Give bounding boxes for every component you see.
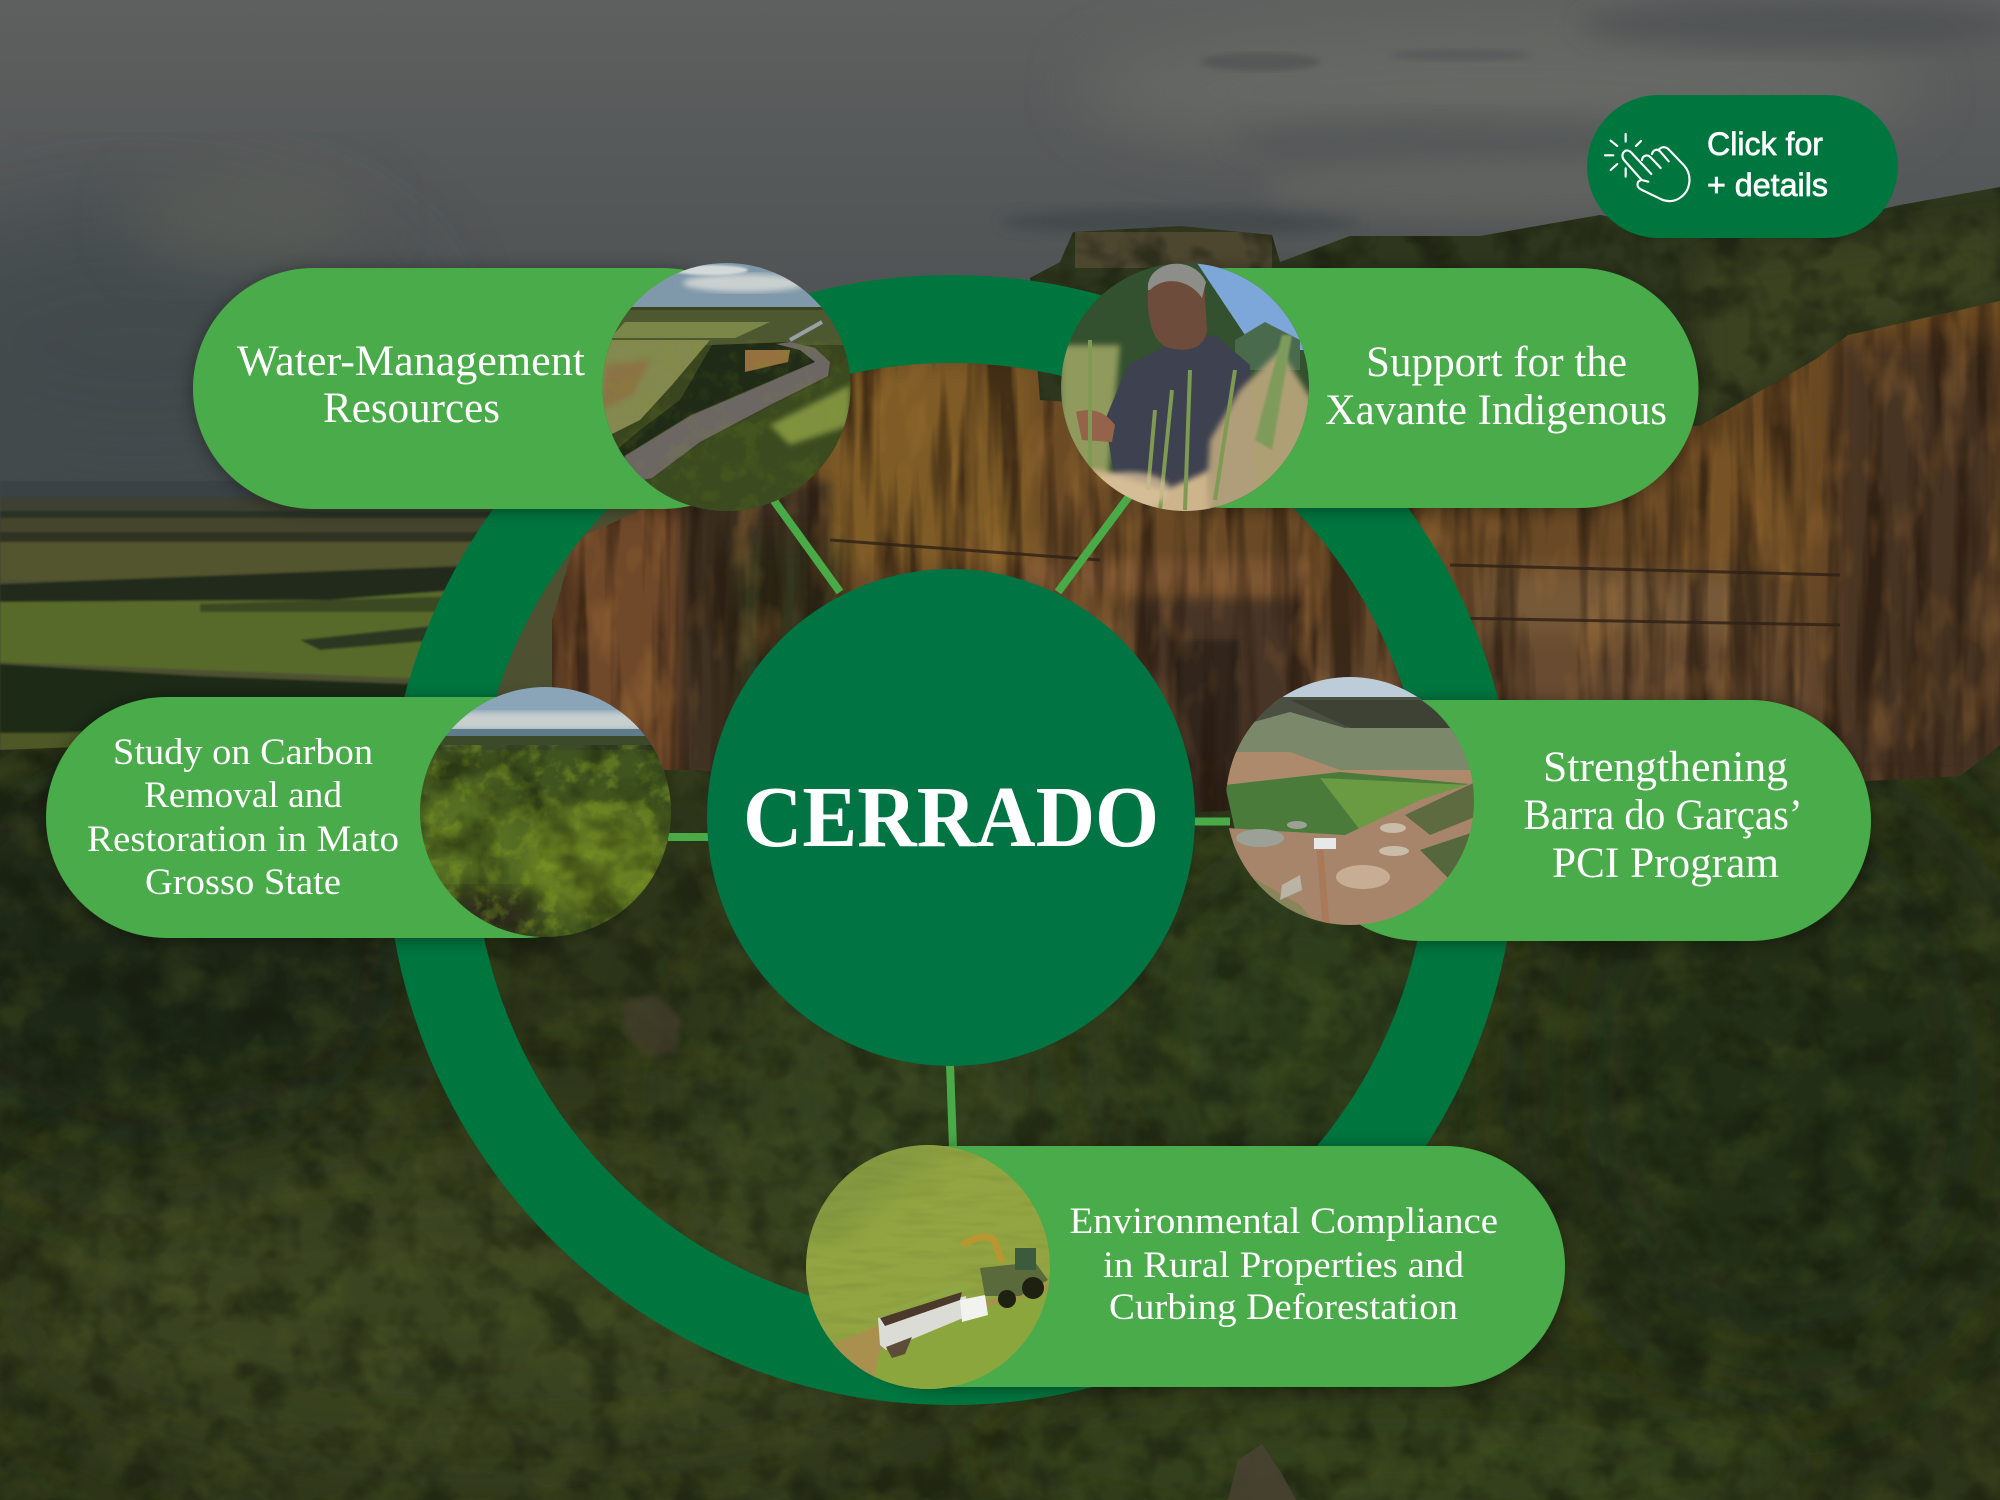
connectors — [668, 495, 1230, 1148]
ring — [430, 319, 1472, 1361]
label: Removal and — [144, 775, 342, 816]
label — [1325, 339, 1667, 434]
label: Water-Management — [237, 338, 585, 385]
cliff — [540, 300, 2000, 830]
label: Xavante Indigenous — [1325, 387, 1667, 434]
label: Study on Carbon — [113, 732, 373, 773]
photo: harvester and truck — [800, 1140, 1055, 1395]
panel: water-management — [193, 260, 860, 520]
distant plain — [0, 481, 800, 771]
photo: man in rice field — [1060, 260, 1312, 520]
button label: + details — [1707, 167, 1828, 203]
panel: environmental compliance — [800, 1140, 1565, 1395]
label — [87, 732, 399, 903]
button label — [1707, 126, 1828, 203]
photo: rural property aerial — [1225, 675, 1480, 930]
harvester — [962, 1237, 1048, 1308]
button label: Click for — [1707, 126, 1823, 162]
photo: river aerial — [600, 260, 860, 520]
label: Restoration in Mato — [87, 819, 399, 860]
label: Strengthening — [1543, 744, 1788, 791]
panel: carbon removal study — [46, 680, 677, 946]
photo: cerrado canopy — [415, 680, 677, 946]
title: CERRADO — [743, 768, 1159, 865]
label: Grosso State — [145, 862, 341, 903]
label: Support for the — [1366, 339, 1627, 386]
label: Environmental Compliance — [1070, 1201, 1498, 1242]
button: click for details — [1587, 95, 1898, 238]
forest — [0, 700, 2000, 1500]
label — [237, 338, 585, 432]
label: Barra do Garças’ — [1524, 792, 1802, 839]
panel: xavante indigenous support — [1060, 260, 1698, 520]
clifftop vegetation — [1030, 187, 2000, 426]
panel: barra do garcas pci program — [1225, 675, 1871, 941]
label — [1070, 1201, 1498, 1328]
truck — [878, 1292, 988, 1358]
label: Resources — [323, 385, 500, 432]
sky — [0, 0, 2000, 520]
central circle — [707, 569, 1195, 1066]
label: PCI Program — [1552, 840, 1779, 887]
label — [1524, 744, 1802, 887]
label: Curbing Deforestation — [1109, 1287, 1458, 1328]
label: in Rural Properties and — [1103, 1245, 1465, 1286]
icon: tapping hand — [1605, 134, 1689, 201]
